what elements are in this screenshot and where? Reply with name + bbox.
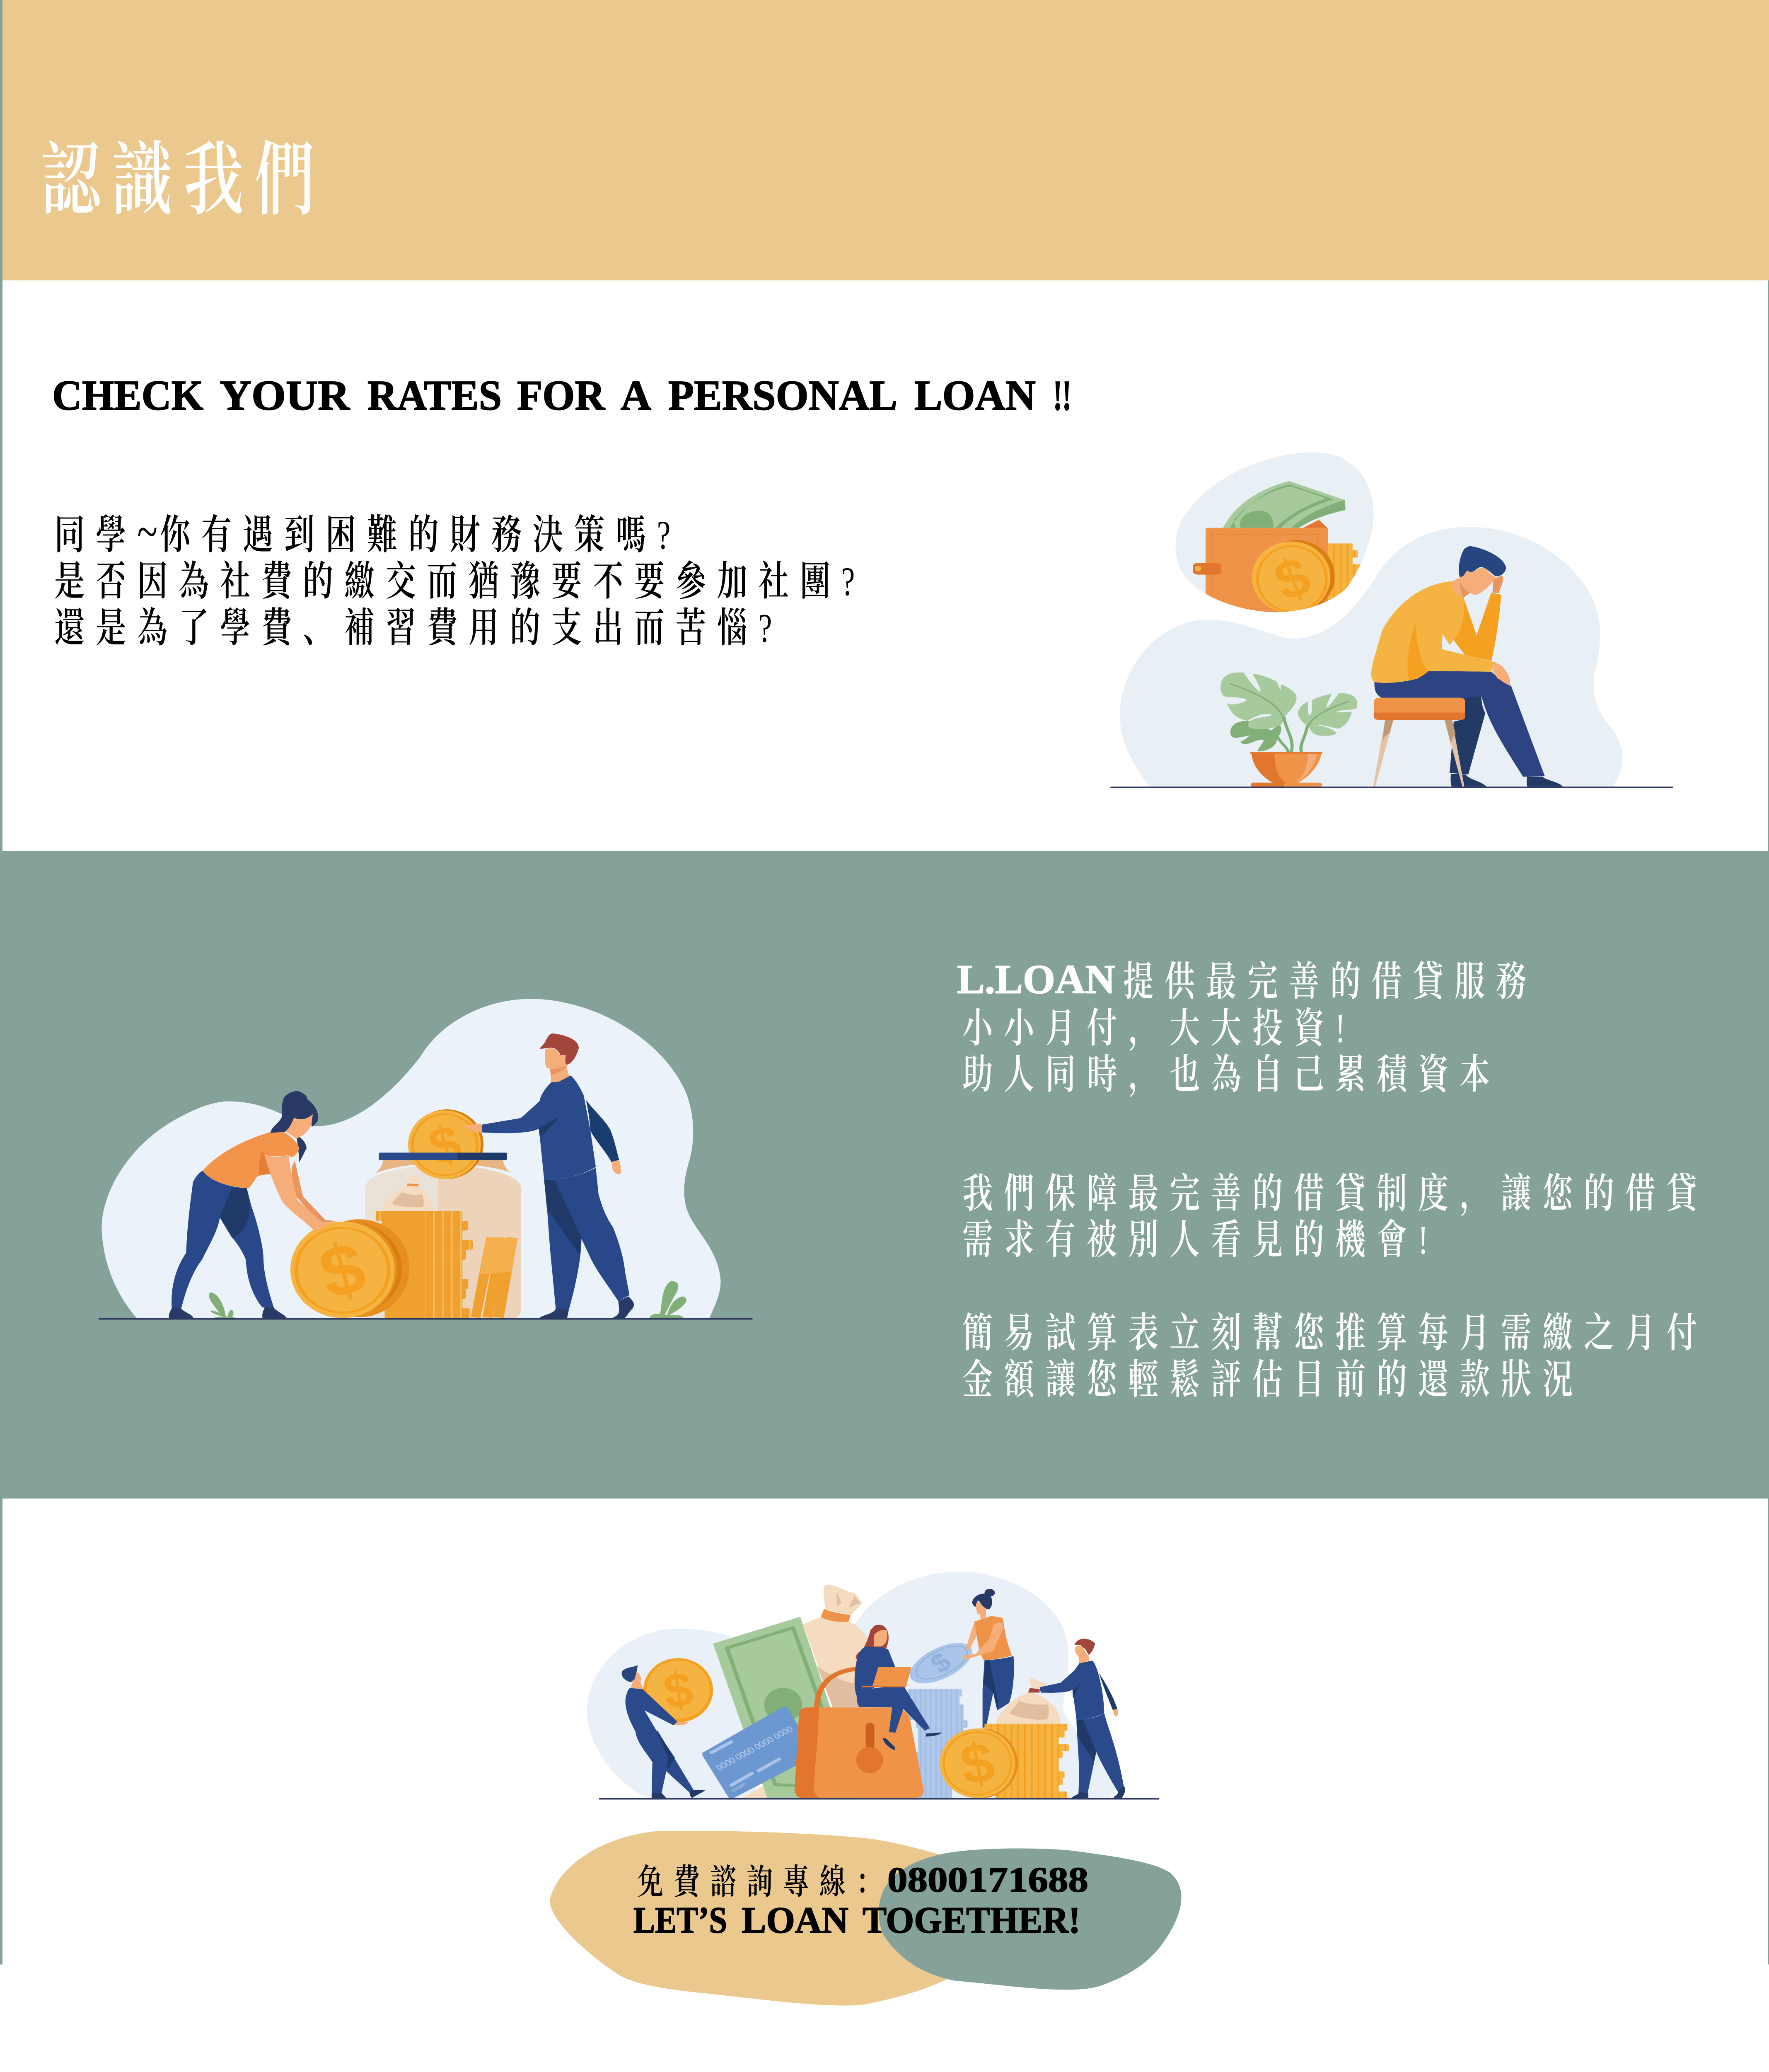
text: loan system: 我們保障最完善的借貸制度，讓您的借貸 bbox=[962, 1171, 1708, 1216]
icon: credit card bbox=[702, 1706, 813, 1798]
icon: small money bag bbox=[995, 1678, 1061, 1724]
illustration: couple saving coins in jar bbox=[99, 999, 753, 1320]
icon: jar bbox=[365, 1160, 521, 1318]
jar lid bbox=[379, 1152, 507, 1160]
call to action text: TOGETHER! bbox=[863, 1900, 1080, 1941]
icon: gold coin stack bbox=[984, 1724, 1069, 1798]
icon: top coin: $ bbox=[423, 1114, 467, 1176]
stool bbox=[1373, 698, 1465, 787]
icon: credit card: 0000 0000 0000 0000 bbox=[713, 1724, 795, 1772]
heading: check your rates: A bbox=[621, 372, 651, 419]
heading: check your rates: FOR bbox=[517, 372, 605, 419]
right edge strip bbox=[1768, 280, 1769, 1964]
person: man bbox=[465, 1034, 634, 1318]
heading: check your rates bbox=[52, 372, 1071, 419]
person: man holding coin bbox=[622, 1658, 713, 1798]
ground line bbox=[599, 1798, 1159, 1800]
heading: check your rates: YOUR bbox=[220, 372, 350, 419]
icon: wallet with cash and coin: $ bbox=[1266, 545, 1319, 612]
text: loan system bbox=[962, 1171, 1708, 1263]
panel: green section bbox=[0, 851, 1769, 1498]
person: woman bbox=[169, 1091, 337, 1318]
icon: wallet with cash and coin bbox=[1206, 481, 1362, 613]
icon: credit card: 00/0000 bbox=[731, 1782, 748, 1793]
call to action text bbox=[633, 1900, 1080, 1941]
intro questions text: 還是為了學費、補習費用的支出而苦惱? bbox=[54, 605, 783, 651]
icon: potted plant bbox=[1220, 673, 1357, 787]
icon: banknote bbox=[713, 1617, 860, 1798]
contact hotline text bbox=[637, 1860, 1088, 1902]
icon: top coin bbox=[408, 1109, 483, 1179]
text: L.LOAN services: 助人同時，也為自己累積資本 bbox=[962, 1052, 1501, 1097]
text: calculator: 簡易試算表立刻幫您推算每月需繳之月付 bbox=[962, 1311, 1708, 1356]
icon: large coin bbox=[290, 1219, 409, 1318]
icon: blue coin stack bbox=[908, 1689, 967, 1798]
intro questions text: 同學~你有遇到困難的財務決策嗎? bbox=[54, 504, 682, 560]
person: standing woman bbox=[964, 1589, 1014, 1728]
icon: gold coin: $ bbox=[955, 1730, 1000, 1797]
call to action text: LET’S bbox=[633, 1900, 727, 1941]
blob: green bbox=[879, 1849, 1182, 1990]
illustration: team with money bbox=[550, 1572, 1182, 2006]
intro questions text: 是否因為社費的繳交而猶豫要不要參加社團? bbox=[54, 559, 866, 604]
blob: right background bbox=[855, 1572, 1120, 1798]
ground line bbox=[1110, 787, 1673, 788]
heading: check your rates: CHECK bbox=[52, 372, 203, 419]
heading: check your rates: PERSONAL bbox=[668, 372, 897, 419]
illustration: worried man with wallet bbox=[1110, 452, 1673, 788]
ground line bbox=[99, 1318, 753, 1320]
icon: gold coin bbox=[940, 1728, 1018, 1798]
text: L.LOAN services: L.LOAN bbox=[957, 956, 1115, 1002]
heading: check your rates: RATES bbox=[367, 372, 502, 419]
text: L.LOAN services: 提供最完善的借貸服務 bbox=[1123, 959, 1537, 1005]
text: L.LOAN services bbox=[957, 956, 1537, 1097]
contact hotline text: 0800171688 bbox=[887, 1860, 1088, 1900]
text: calculator: 金額讓您輕鬆評估目前的還款狀況 bbox=[962, 1357, 1584, 1402]
wallet clasp bbox=[1193, 563, 1221, 575]
text: L.LOAN services: 小小月付，大大投資! bbox=[962, 1006, 1356, 1051]
blob: background bbox=[102, 999, 721, 1318]
text: calculator bbox=[962, 1311, 1708, 1402]
person: seated man bbox=[1371, 546, 1563, 787]
blob: left background bbox=[587, 1629, 757, 1798]
icon: plant sprouts bbox=[209, 1281, 686, 1318]
person: woman with laptop bbox=[855, 1625, 942, 1750]
person: man holding coin: $ bbox=[660, 1662, 696, 1719]
icon: money bag in jar bbox=[382, 1175, 433, 1211]
heading: check your rates: !! bbox=[1053, 372, 1071, 419]
icon: padlock bag bbox=[795, 1669, 924, 1798]
icon: coin stacks bbox=[376, 1211, 518, 1318]
icon: large coin: $ bbox=[311, 1226, 374, 1314]
blob: background bbox=[1120, 527, 1623, 787]
intro questions text bbox=[54, 504, 866, 651]
blob: thought bubble bbox=[1175, 452, 1374, 612]
icon: blue coin: $ bbox=[925, 1647, 957, 1679]
left edge strip bbox=[0, 0, 2, 1964]
heading: check your rates: LOAN bbox=[914, 372, 1036, 419]
contact hotline text: 免費諮詢專線： bbox=[637, 1863, 892, 1902]
icon: blue coin bbox=[901, 1635, 981, 1691]
text: loan system: 需求有被別人看見的機會! bbox=[962, 1218, 1439, 1263]
icon: big money bag bbox=[803, 1585, 876, 1707]
call to action text: LOAN bbox=[742, 1900, 848, 1941]
person: man with bag bbox=[1039, 1639, 1125, 1798]
title: 認識我們 bbox=[41, 136, 326, 225]
blob: tan bbox=[550, 1831, 956, 2006]
header band bbox=[2, 0, 1769, 280]
